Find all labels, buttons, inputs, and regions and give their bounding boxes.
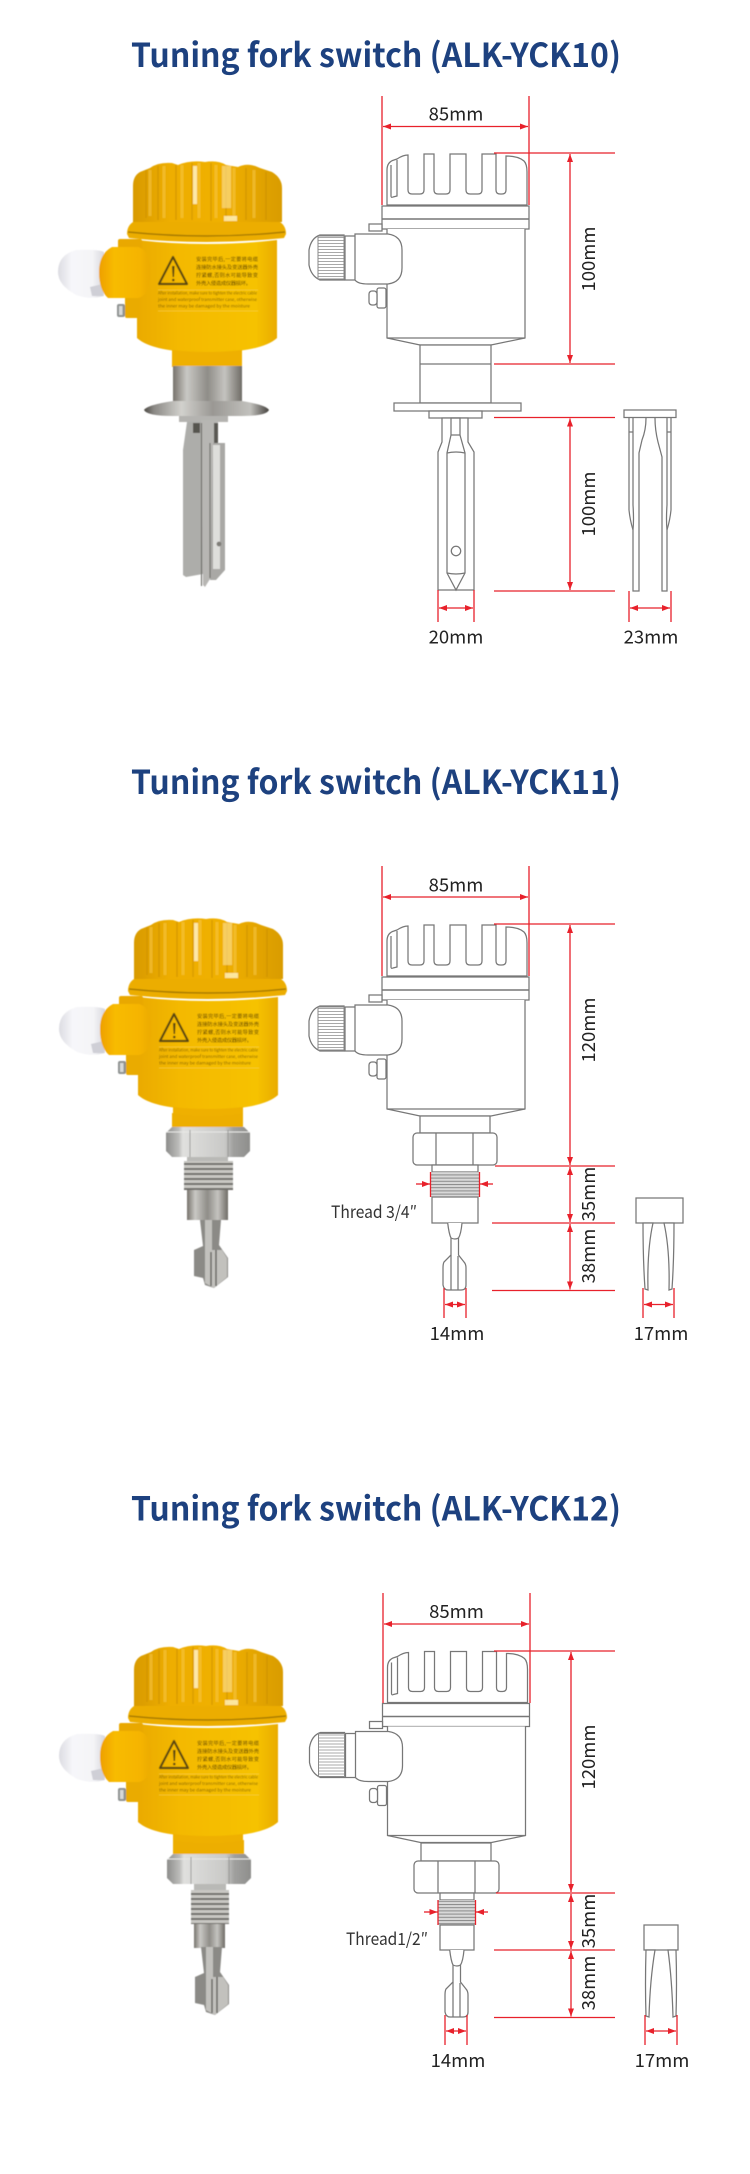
product photo: ALK-YCK11: [59, 918, 287, 1288]
dimension: 35mm: 35mm: [575, 1894, 601, 1948]
callout: thread 1/2: Thread1/2″: [346, 1925, 428, 1950]
dimension: 85mm: 85mm: [429, 872, 483, 898]
section: ALK-YCK12: [59, 1482, 689, 2073]
steel tube: [173, 366, 242, 404]
callout: thread 3/4: [331, 1172, 493, 1223]
dimension: 85mm: [382, 866, 529, 976]
dimension: 14mm: [430, 1288, 484, 1346]
section: ALK-YCK11: [59, 756, 688, 1346]
technical drawing: ALK-YCK11 front: [309, 925, 529, 1290]
dimension: 85mm: 85mm: [429, 100, 483, 126]
thread: [194, 1884, 226, 1890]
dimension: 38mm: [492, 1224, 615, 1290]
dimension: 85mm: 85mm: [429, 1598, 484, 1624]
title: ALK-YCK10: Tuning fork switch (ALK-YCK10): [131, 29, 621, 77]
product photo: ALK-YCK12: [59, 1645, 287, 2015]
shaft: [194, 1924, 225, 1948]
technical drawing: ALK-YCK12 front: [310, 1652, 530, 2017]
dimension: 14mm: [431, 2015, 485, 2073]
flange collar: [179, 416, 228, 422]
dimension: 20mm: [429, 590, 483, 650]
dimension: 100mm upper: 100mm: [575, 226, 601, 292]
dimension: 38mm: 38mm: [575, 1229, 601, 1283]
dimension: 23mm: 23mm: [624, 624, 678, 650]
thread block: [431, 1172, 479, 1197]
fork: [194, 1220, 228, 1288]
dimension: 100mm upper: [494, 153, 615, 364]
fork: [443, 1223, 466, 1290]
dimension: 17mm: 17mm: [635, 2047, 689, 2073]
thread block: [438, 1900, 475, 1925]
dimension: 17mm: 17mm: [634, 1320, 688, 1346]
section: ALK-YCK10: [58, 29, 678, 650]
dimension: 100mm lower: 100mm: [575, 471, 601, 537]
thread: [187, 1157, 228, 1161]
dimension: 23mm: [624, 591, 678, 650]
dimension: 20mm: 20mm: [429, 624, 483, 650]
callout: thread 3/4: Thread 3/4″: [331, 1198, 417, 1223]
technical drawing: ALK-YCK11 side: [636, 1198, 683, 1290]
dimension: 120mm: [494, 1651, 615, 1893]
dimension: 14mm: 14mm: [430, 1320, 484, 1346]
dimension: 35mm: 35mm: [575, 1167, 601, 1221]
dimension: 85mm: [382, 96, 529, 205]
dimension: 14mm: 14mm: [431, 2047, 485, 2073]
fork bright strip: [213, 445, 220, 569]
fork front view: [438, 418, 474, 590]
dimension: 35mm: [492, 1167, 615, 1223]
clamp flange: [144, 401, 269, 416]
fork hole: [217, 542, 221, 546]
dimension: 120mm: 120mm: [575, 1724, 601, 1790]
technical drawing: ALK-YCK10 front: [309, 154, 529, 590]
fork: [195, 1947, 229, 2015]
fork blade centre: [201, 420, 218, 587]
dimension: 17mm: [634, 1288, 688, 1346]
technical drawing: ALK-YCK12 side: [644, 1925, 678, 2017]
fork blade left: [183, 422, 203, 577]
fork: [445, 1950, 468, 2017]
dimension: 120mm: [494, 924, 615, 1166]
fork blade right: [210, 443, 225, 580]
fork lines: [202, 423, 210, 586]
product photo: ALK-YCK10: [58, 161, 286, 587]
dimension: 38mm: [494, 1951, 615, 2018]
dimension: 35mm: [494, 1894, 615, 1950]
dimension: 17mm: [635, 2015, 689, 2073]
callout: thread 1/2: [346, 1900, 488, 1950]
dimension: 100mm lower: [494, 418, 615, 591]
shaft: [187, 1190, 228, 1220]
title: ALK-YCK11: Tuning fork switch (ALK-YCK11): [131, 756, 621, 804]
technical drawing: ALK-YCK10 side: [624, 410, 676, 591]
title: ALK-YCK12: Tuning fork switch (ALK-YCK12): [131, 1482, 621, 1530]
dimension: 120mm: 120mm: [575, 997, 601, 1063]
fork dark spot: [193, 423, 200, 433]
fork slot: [214, 423, 218, 443]
dimension: 85mm: [383, 1593, 530, 1703]
dimension: 38mm: 38mm: [575, 1956, 601, 2010]
